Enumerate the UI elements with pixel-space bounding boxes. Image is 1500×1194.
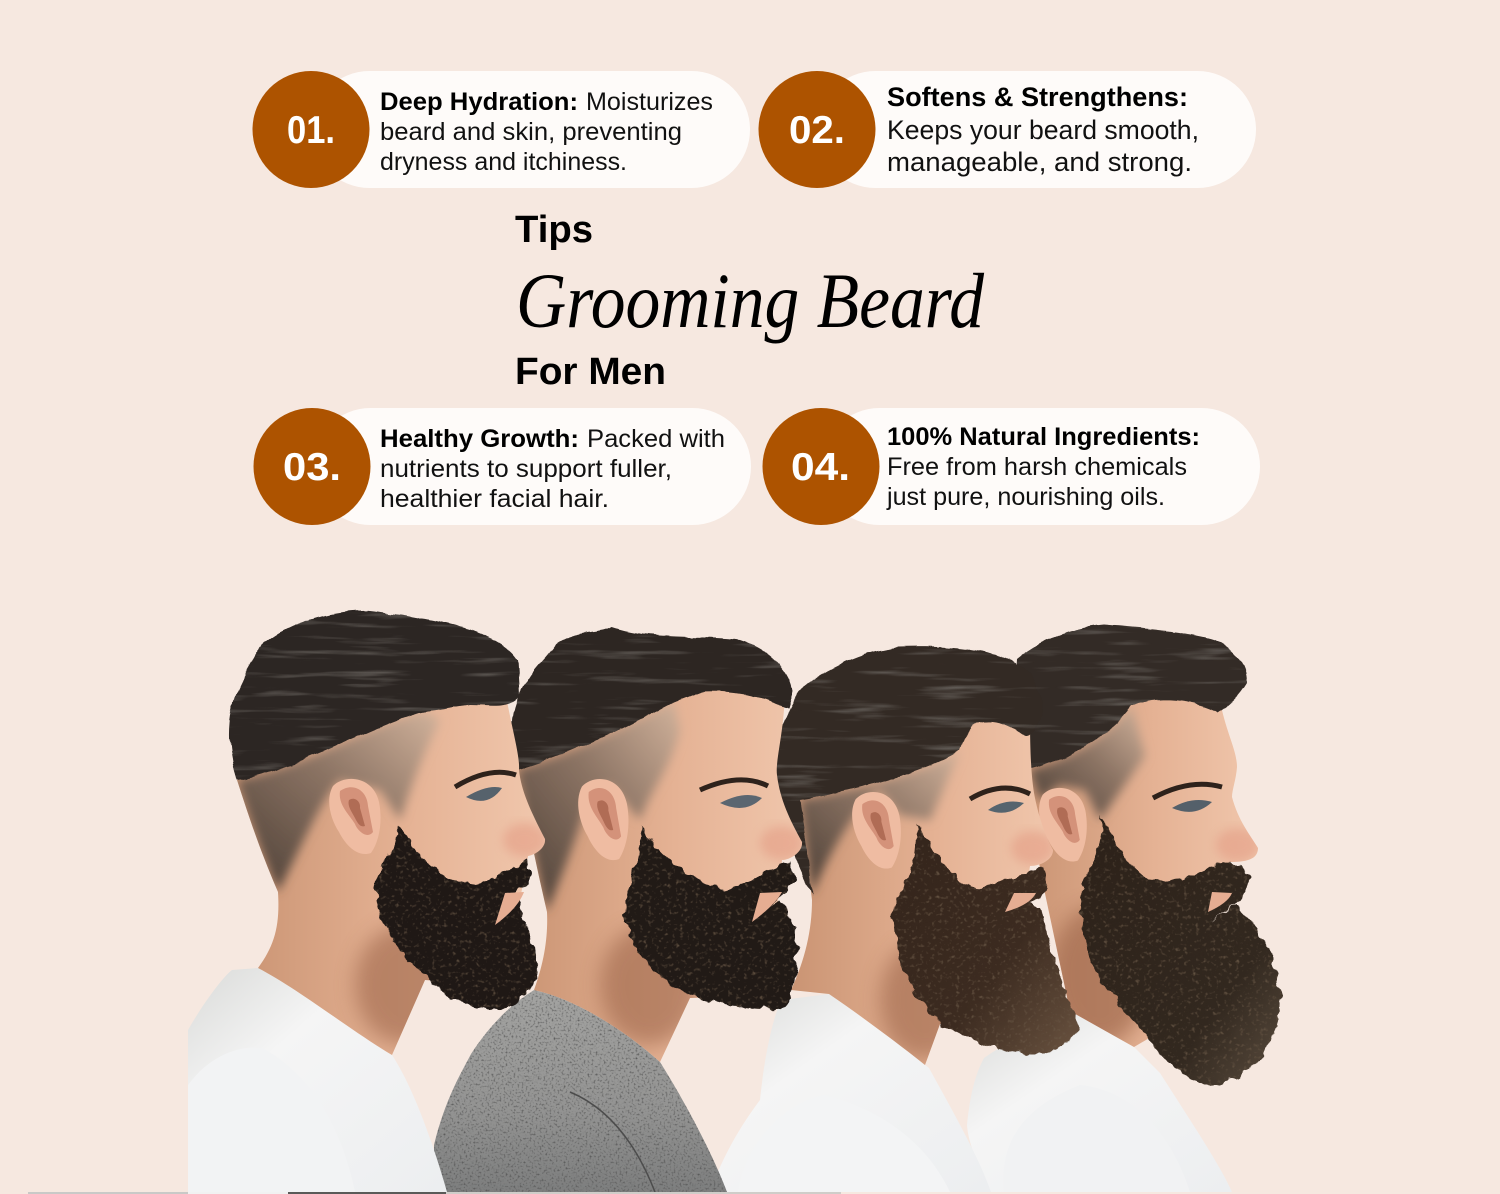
title: Grooming Beard (516, 257, 985, 344)
card 02 text: Keeps your beard smooth, (887, 115, 1199, 145)
card 04 text: just pure, nourishing oils. (886, 483, 1165, 511)
number badge 01 (252, 71, 370, 188)
cropped image strip at bottom edge (28, 1192, 841, 1194)
illustration: four men in profile with growing beards (188, 611, 1280, 1192)
number badge 03 (254, 408, 370, 525)
card 03 text (380, 425, 725, 513)
number badge 04 (762, 408, 880, 525)
number badge 03: 03. (283, 446, 341, 489)
number badge 04: 04. (791, 446, 850, 489)
number badge 02 (758, 71, 876, 188)
card 01: deep hydration (252, 71, 750, 188)
man 2: grey t-shirt, medium beard (434, 627, 810, 1192)
card 04 text: Free from harsh chemicals (887, 453, 1187, 481)
card 03 text: healthier facial hair. (380, 485, 609, 513)
title: For Men (515, 351, 666, 393)
card 01 text (380, 88, 713, 176)
card 02 text: Softens & Strengthens: (887, 82, 1188, 112)
card 04: natural ingredients (762, 408, 1260, 525)
man 1: white t-shirt, short beard (188, 611, 550, 1192)
card 02 text (887, 82, 1199, 177)
card 01 text: Moisturizes (586, 88, 713, 116)
card 02 text: manageable, and strong. (887, 147, 1192, 177)
title (515, 209, 985, 393)
card 02: softens and strengthens (758, 71, 1256, 188)
card 01 text: Deep Hydration: (380, 88, 578, 116)
number badge 02: 02. (789, 109, 845, 152)
card 03 text: Packed with (587, 425, 725, 453)
card 03: healthy growth (254, 408, 751, 525)
card 03 text: nutrients to support fuller, (380, 455, 672, 483)
man 3: full brown beard (710, 647, 1079, 1192)
number badge 01: 01. (287, 109, 335, 152)
card 03 text: Healthy Growth: (380, 425, 579, 453)
title: Tips (515, 209, 593, 251)
card 01 text: beard and skin, preventing (380, 118, 682, 146)
card 01 text: dryness and itchiness. (380, 148, 627, 176)
card 04 text: 100% Natural Ingredients: (887, 423, 1200, 451)
card 04 text (886, 423, 1200, 511)
man 4: longest beard (967, 625, 1280, 1192)
